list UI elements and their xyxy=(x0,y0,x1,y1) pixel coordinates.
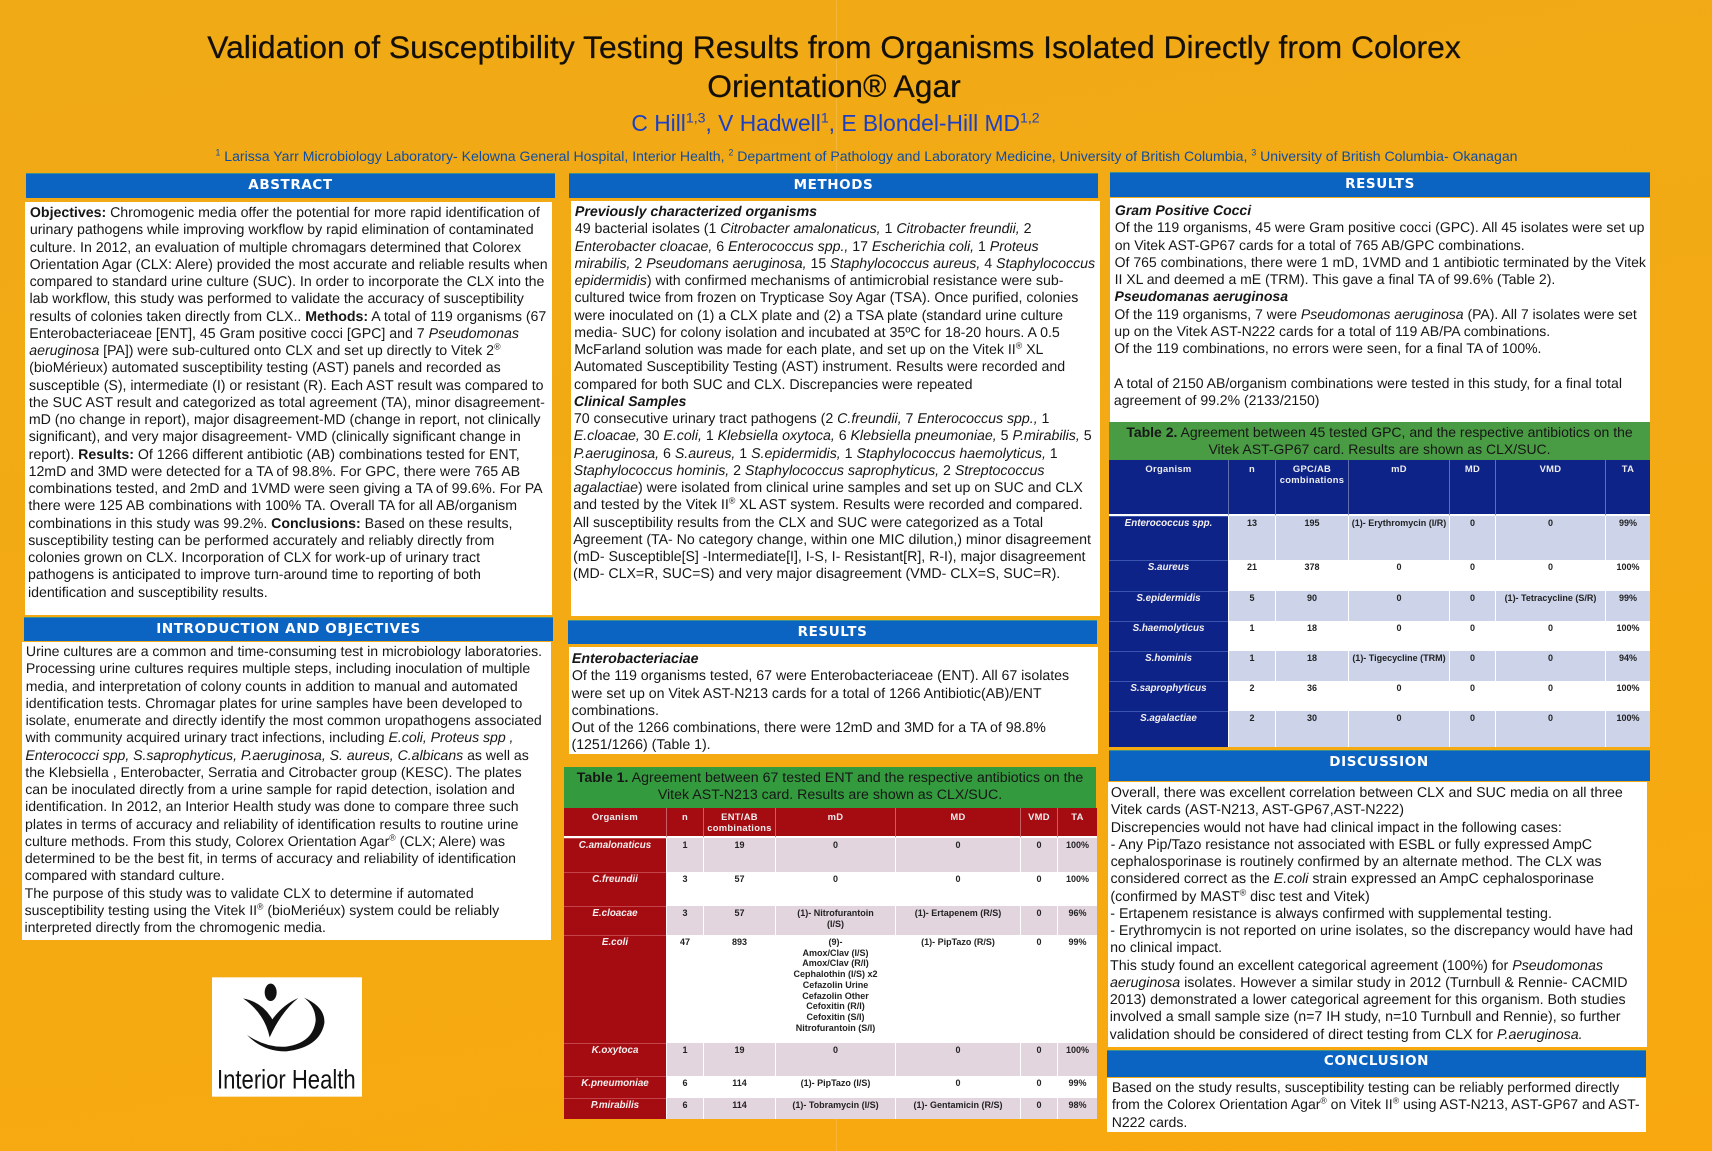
text: abstract: report). Results: Of 1266 different antibiotic (AB) combinations tested for ENT, xyxy=(29,446,520,462)
table 1 grid: (1)- Nitrofurantoin xyxy=(797,908,874,918)
text: results GPC and PA: II XL and deemed a mE (TRM). This gave a final TA of 99.6% (Table 2). xyxy=(1115,271,1555,287)
table 1 grid: 100% xyxy=(1066,874,1089,884)
text: abstract: the SUC AST result and categorized as total agreement (TA), minor disagreement- xyxy=(29,394,545,410)
text: discussion: considered correct as the E.coli strain expressed an AmpC cephalosporinase xyxy=(1110,872,1594,888)
table 2 grid: 0 xyxy=(1470,593,1475,603)
table 2 grid: 0 xyxy=(1470,683,1475,693)
table 1 grid: (I/S) xyxy=(827,919,844,929)
table 1 grid: C.amalonaticus xyxy=(579,840,651,851)
heading: methods: METHODS xyxy=(794,177,873,193)
text: introduction: plates in terms of accuracy and reliability of identification results to routine urine xyxy=(25,816,519,832)
table 2 grid: mD xyxy=(1391,463,1407,474)
text: introduction: The purpose of this study was to validate CLX to determine if automated xyxy=(25,885,474,901)
table 1 grid: (1)- PipTazo (R/S) xyxy=(921,937,995,947)
table 2 grid: combinations xyxy=(1280,474,1344,485)
title xyxy=(207,29,1461,104)
table 1 grid: n xyxy=(682,811,688,822)
table 2 grid: 0 xyxy=(1548,713,1553,723)
table 2 grid: 18 xyxy=(1307,623,1317,633)
table 2: GPC agreement xyxy=(1109,422,1650,747)
table 2 grid: 0 xyxy=(1548,683,1553,693)
table 1 caption: Vitek AST-N213 card. Results are shown as CLX/SUC. xyxy=(658,787,1002,803)
table 2 grid: 0 xyxy=(1396,713,1402,723)
table 1 grid: Cefoxitin (R/I) xyxy=(806,1001,865,1011)
text: results GPC and PA xyxy=(1110,198,1650,422)
text: results GPC and PA: Of 765 combinations, there were 1 mD, 1VMD and 1 antibiotic terminated by the Vitek xyxy=(1115,254,1646,270)
text: methods: Automated Susceptibility Testing (AST) instrument. Results were recorded and xyxy=(574,359,1065,375)
text: introduction: the Klebsiella , Enterobacter, Serratia and Citrobacter group (KESC). The plates xyxy=(25,764,522,780)
table 1 grid: 100% xyxy=(1066,1045,1089,1055)
table 2 grid: 100% xyxy=(1616,562,1640,572)
authors: C Hill1,3, V Hadwell1, E Blondel-Hill MD1,2 xyxy=(631,109,1040,136)
table 1 grid: P.mirabilis xyxy=(591,1100,639,1111)
table 1 grid: 0 xyxy=(1036,1100,1042,1110)
table 1 grid: Cefazolin Urine xyxy=(803,980,868,990)
text: methods: Enterobacter cloacae, 6 Enterococcus spp., 17 Escherichia coli, 1 Proteus xyxy=(575,238,1039,254)
text: abstract: significant), and very major disagreement- VMD (clinically significant change in xyxy=(29,429,521,445)
text: abstract: susceptible (S), intermediate (I) or resistant (R). Each AST result was compared to xyxy=(29,377,544,393)
text: abstract: mD (no change in report), major disagreement-MD (change in report, not clinically xyxy=(29,411,541,427)
text: abstract xyxy=(25,202,552,615)
table 1 grid: 19 xyxy=(734,1045,744,1055)
table 1 grid: (1)- Gentamicin (R/S) xyxy=(913,1100,1002,1110)
table 1 grid: VMD xyxy=(1028,811,1050,822)
text: methods: media- SUC) for colony isolation and incubated at 35ºC for 18-20 hours. A 0.5 xyxy=(574,324,1060,340)
text: introduction: susceptibility testing using the Vitek II® (bioMeriéux) system could be reliably xyxy=(25,901,499,918)
text: methods: Previously characterized organisms xyxy=(575,203,817,219)
text: conclusion: Based on the study results, susceptibility testing can be reliably performed directly xyxy=(1112,1079,1619,1095)
text: methods: Clinical Samples xyxy=(574,393,686,409)
table 2 grid: S.haemolyticus xyxy=(1133,623,1204,634)
table 1 grid: 99% xyxy=(1068,1078,1086,1088)
table 2 grid: 90 xyxy=(1307,593,1317,603)
table 1 grid: 0 xyxy=(1036,874,1042,884)
table 2 grid: 0 xyxy=(1470,653,1475,663)
text: discussion: no clinical impact. xyxy=(1110,941,1222,957)
text: results Enterobacteriaciae: Out of the 1266 combinations, there were 12mD and 3MD for a TA of 98.8% xyxy=(572,719,1046,735)
heading: abstract xyxy=(26,173,555,198)
table 1 grid: E.coli xyxy=(602,937,628,948)
table 1 grid: 57 xyxy=(734,874,744,884)
panel: results (Enterobacteriaciae) xyxy=(568,620,1098,754)
table 2 grid: (1)- Tetracycline (S/R) xyxy=(1505,593,1596,603)
table 2 grid: 99% xyxy=(1619,593,1637,603)
text: results GPC and PA: up on the Vitek AST-N222 cards for a total of 119 AB/PA combinations. xyxy=(1114,323,1550,339)
table 1 grid: 47 xyxy=(680,937,690,947)
table 1 grid: 0 xyxy=(955,1045,960,1055)
text: methods: and tested by the Vitek II® XL AST system. Results were recorded and compared. xyxy=(573,496,1083,513)
text: introduction: with community acquired urinary tract infections, including E.coli, Proteus spp , xyxy=(25,730,514,746)
table 1 grid: Cefazolin Other xyxy=(802,991,869,1001)
table 2 grid: 21 xyxy=(1247,562,1257,572)
text: abstract: there were 125 AB combinations with 100% TA. Overall TA for all AB/organism xyxy=(28,498,517,514)
table 2 grid: 0 xyxy=(1548,653,1553,663)
table 1 grid: 0 xyxy=(833,1045,838,1055)
table 2 grid: 0 xyxy=(1470,562,1475,572)
logo: Interior Health xyxy=(212,977,362,1097)
text: methods: agalactiae) were isolated from clinical urine samples and set up on SUC and CLX xyxy=(573,479,1083,495)
text: conclusion xyxy=(1107,1078,1646,1132)
text: discussion: - Ertapenem resistance is always confirmed with supplemental testing. xyxy=(1110,906,1552,922)
text: methods: 70 consecutive urinary tract pathogens (2 C.freundii, 7 Enterococcus spp., 1 xyxy=(574,410,1049,426)
text: conclusion: from the Colorex Orientation Agar® on Vitek II® using AST-N213, AST-GP67 and AST- xyxy=(1112,1096,1640,1113)
table 2 grid: VMD xyxy=(1540,463,1561,474)
table 2 grid: 94% xyxy=(1619,653,1637,663)
table 2 grid: 2 xyxy=(1249,713,1254,723)
text: abstract: pathogens is anticipated to improve turn-around time to reporting of both xyxy=(28,567,481,583)
text: results GPC and PA: Pseudomanas aeruginosa xyxy=(1114,289,1288,305)
text: abstract: compared to standard urine culture (SUC). In order to incorporate the CLX into the xyxy=(30,273,544,289)
heading: results: RESULTS xyxy=(798,624,867,640)
text: discussion: 2013) demonstrated a lower categorical agreement for this organism. Both studies xyxy=(1110,992,1626,1008)
table 2 grid: (1)- Erythromycin (I/R) xyxy=(1352,518,1446,528)
panel: introduction and objectives xyxy=(22,617,553,940)
table 2 grid: 0 xyxy=(1548,562,1553,572)
text: conclusion: N222 cards. xyxy=(1112,1114,1187,1130)
table 1 grid: Nitrofurantoin (S/I) xyxy=(796,1023,875,1033)
text: abstract: culture. In 2012, an evaluation of multiple chromagars determined that Colorex xyxy=(30,239,521,255)
table 1 grid: 96% xyxy=(1068,908,1086,918)
heading: conclusion: CONCLUSION xyxy=(1324,1053,1429,1069)
table 2 grid: 36 xyxy=(1307,683,1317,693)
table 1 caption xyxy=(564,767,1096,808)
table 2 grid: 0 xyxy=(1548,518,1553,528)
text: discussion: cephalosporinase is routinely confirmed by an alternate method. The CLX was xyxy=(1111,854,1602,870)
table 2 grid: GPC/AB xyxy=(1293,463,1331,474)
panel: results (Gram positive cocci, Pseudomonas) xyxy=(1110,172,1650,422)
table 2 grid xyxy=(1109,460,1650,747)
text: methods: cultured twice from frozen on Trypticase Soy Agar (TSA). Once purified, colonies xyxy=(574,290,1078,306)
table 2 grid: S.aureus xyxy=(1148,562,1189,573)
text: results GPC and PA: on Vitek AST-GP67 cards for a total of 765 AB/GPC combinations. xyxy=(1115,237,1525,253)
table 2 grid: S.hominis xyxy=(1145,653,1192,664)
title: Validation of Susceptibility Testing Results from Organisms Isolated Directly from Colorex xyxy=(207,29,1461,65)
table 1 grid: 0 xyxy=(955,840,960,850)
text: abstract: lab workflow, this study was performed to validate the accuracy of susceptibility xyxy=(29,291,524,307)
text: results Enterobacteriaciae: (1251/1266) (Table 1). xyxy=(571,737,711,753)
table 2 grid: Organism xyxy=(1145,463,1192,474)
text: results GPC and PA: agreement of 99.2% (2133/2150) xyxy=(1114,392,1319,408)
table 1 grid: combinations xyxy=(707,822,772,833)
text: discussion: Vitek cards (AST-N213, AST-GP67,AST-N222) xyxy=(1111,803,1404,819)
text: results Enterobacteriaciae: Of the 119 organisms tested, 67 were Enterobacteriaceae (ENT). All 67 isolates xyxy=(572,668,1069,684)
table 1 grid: 0 xyxy=(833,874,838,884)
table 1 grid: Cephalothin (I/S) x2 xyxy=(793,969,878,979)
table 1 grid: ENT/AB xyxy=(721,811,758,822)
text: results GPC and PA: Of the 119 organisms, 45 were Gram positive cocci (GPC). All 45 isolates were set up xyxy=(1115,220,1645,236)
table 2 grid: 0 xyxy=(1548,623,1553,633)
text: abstract: combinations in this study was 99.2%. Conclusions: Based on these results, xyxy=(28,515,513,531)
table 1 grid: 0 xyxy=(1036,840,1042,850)
text: introduction xyxy=(22,642,551,940)
table 2 grid: 0 xyxy=(1396,562,1402,572)
table 1 grid: K.pneumoniae xyxy=(581,1078,649,1089)
panel: methods xyxy=(569,173,1100,616)
table 2 grid: 13 xyxy=(1247,518,1257,528)
text: discussion: Overall, there was excellent correlation between CLX and SUC media on all three xyxy=(1111,785,1623,801)
panel: discussion xyxy=(1108,750,1650,1047)
table 1 grid: C.freundii xyxy=(592,874,638,885)
affiliations: 1 Larissa Yarr Microbiology Laboratory- Kelowna General Hospital, Interior Health, 2 Department of Pathology and Laboratory Medicine, University of British Columbia, 3 University of British Columbia- Okanagan xyxy=(215,147,1518,164)
text: methods: Staphylococcus hominis, 2 Staphylococcus saprophyticus, 2 Streptococcus xyxy=(574,462,1045,478)
table 1 grid: 3 xyxy=(682,874,688,884)
table 2 grid: 1 xyxy=(1249,623,1254,633)
text: methods: P.aeruginosa, 6 S.aureus, 1 S.epidermidis, 1 Staphylococcus haemolyticus, 1 xyxy=(574,445,1058,461)
table 1 grid: (1)- Tobramycin (I/S) xyxy=(792,1100,879,1110)
panel: conclusion xyxy=(1107,1050,1646,1132)
text: results GPC and PA: Of the 119 organisms, 7 were Pseudomonas aeruginosa (PA). All 7 isolates were set xyxy=(1114,306,1637,322)
text: introduction: can be inoculated directly from a urine sample for rapid detection, isolation and xyxy=(25,781,515,797)
table 1 grid: 0 xyxy=(1036,937,1042,947)
heading: conclusion xyxy=(1107,1050,1646,1077)
table 2 grid: 100% xyxy=(1616,683,1640,693)
text: abstract: Enterobacteriaceae [ENT], 45 Gram positive cocci [GPC] and 7 Pseudomonas xyxy=(29,325,519,341)
text: methods xyxy=(570,201,1100,616)
panel: abstract xyxy=(25,173,555,615)
table 1 grid: mD xyxy=(828,811,843,822)
text: discussion: Discrepencies would not have had clinical impact in the following cases: xyxy=(1111,820,1562,836)
table 2 grid: S.agalactiae xyxy=(1140,713,1197,724)
text: introduction: determined to be the best fit, in terms of accuracy and reliability of identification xyxy=(25,850,516,866)
table 1 grid: 0 xyxy=(955,874,960,884)
text: results Enterobacteriaciae xyxy=(569,647,1098,754)
text: discussion: involved a small sample size (n=7 IH study, n=10 Turnbull and Rennie), so further xyxy=(1110,1010,1621,1026)
table 2 grid: 100% xyxy=(1616,713,1640,723)
text: methods: Agreement (TA- No category change, within one MIC dilution,) minor disagreement xyxy=(573,531,1091,547)
table 2 grid: 5 xyxy=(1249,593,1254,603)
text: introduction: identification tests. Chromagar plates for urine samples have been developed to xyxy=(26,695,522,711)
table 1 grid: 99% xyxy=(1068,937,1086,947)
heading: results: RESULTS xyxy=(1345,176,1415,192)
table 2 grid: 195 xyxy=(1304,518,1320,528)
table 2 grid: S.epidermidis xyxy=(1136,593,1201,604)
text: abstract: aeruginosa [PA]) were sub-cultured onto CLX and set up directly to Vitek 2® xyxy=(29,342,501,358)
table 1 grid: (1)- PipTazo (I/S) xyxy=(801,1078,870,1088)
heading: abstract: ABSTRACT xyxy=(248,177,333,193)
table 2 grid: 0 xyxy=(1396,683,1402,693)
table 1 grid: K.oxytoca xyxy=(592,1045,638,1056)
heading: methods xyxy=(569,173,1098,198)
table 1 grid: MD xyxy=(950,811,966,822)
text: methods: (mD- Susceptible[S] -Intermediate[I], I-S, I- Resistant[R], R-I), major disagreement xyxy=(573,548,1086,564)
text: methods: All susceptibility results from the CLX and SUC were categorized as a Total xyxy=(573,514,1043,530)
table 2 grid: 0 xyxy=(1396,623,1402,633)
table 2 grid: 2 xyxy=(1249,683,1254,693)
text: methods: compared for both SUC and CLX. Discrepancies were repeated xyxy=(574,376,973,392)
text: abstract: combinations tested, and 2mD and 1VMD were seen giving a TA of 99.6%. For PA xyxy=(28,480,543,496)
title: Orientation® Agar xyxy=(707,68,961,104)
text: abstract: Objectives: Chromogenic media offer the potential for more rapid identification of xyxy=(30,204,540,220)
table 2 grid: S.saprophyticus xyxy=(1130,683,1207,694)
text: methods: epidermidis) with confirmed mechanisms of antimicrobial resistance were sub- xyxy=(575,272,1063,288)
table 1 grid xyxy=(564,808,1097,1119)
table 1 grid: E.cloacae xyxy=(592,908,638,919)
table 1 grid: 0 xyxy=(955,1078,960,1088)
table 1 grid: (9)- xyxy=(828,937,842,947)
table 1 grid: 6 xyxy=(682,1100,688,1110)
table 1: ENT agreement xyxy=(564,767,1097,1119)
table 1 grid: 57 xyxy=(734,908,744,918)
heading: discussion: DISCUSSION xyxy=(1329,754,1429,770)
table 2 grid: 0 xyxy=(1396,593,1402,603)
heading: introduction and objectives xyxy=(24,617,553,641)
table 1 grid: 19 xyxy=(734,840,744,850)
table 1 grid: 0 xyxy=(1036,908,1042,918)
text: results GPC and PA: A total of 2150 AB/organism combinations were tested in this study, for a final total xyxy=(1114,375,1622,391)
text: introduction: media, and interpretation of colony counts in addition to manual and automated xyxy=(26,678,518,694)
table 2 grid: 1 xyxy=(1249,653,1254,663)
text: abstract: susceptibility testing can be performed accurately and reliably directly from xyxy=(28,532,494,548)
text: abstract: colonies grown on CLX. Incorporation of CLX for work-up of urinary tract xyxy=(28,549,480,565)
table 1 grid: 3 xyxy=(682,908,688,918)
text: results GPC and PA: Gram Positive Cocci xyxy=(1115,202,1251,218)
table 1 grid: 0 xyxy=(833,840,838,850)
text: abstract: Orientation Agar (CLX: Alere) provided the most accurate and reliable results when xyxy=(30,256,548,272)
table 1 grid: 98% xyxy=(1068,1100,1086,1110)
text: results Enterobacteriaciae: combinations. xyxy=(572,702,659,718)
table 2 caption: Table 2. Agreement between 45 tested GPC, and the respective antibiotics on the xyxy=(1126,424,1633,440)
text: results Enterobacteriaciae: Enterobacteriaciae xyxy=(572,650,699,666)
table 2 caption xyxy=(1109,422,1650,460)
table 1 grid: 114 xyxy=(732,1100,747,1110)
text: results Enterobacteriaciae: were set up on Vitek AST-N213 cards for a total of 1266 Antibiotic(AB)/ENT xyxy=(572,685,1042,701)
text: abstract: results of colonies taken directly from CLX.. Methods: A total of 119 organisms (67 xyxy=(29,308,546,324)
text: introduction: compared with standard culture. xyxy=(25,868,225,884)
heading: introduction and objectives: INTRODUCTION AND OBJECTIVES xyxy=(156,621,421,637)
text: introduction: Urine cultures are a common and time-consuming test in microbiology laboratories. xyxy=(26,643,542,659)
table 2 grid: MD xyxy=(1465,463,1480,474)
text: introduction: Processing urine cultures requires multiple steps, including inoculation of multiple xyxy=(26,661,530,677)
table 1 grid: TA xyxy=(1071,811,1084,822)
table 2 grid: n xyxy=(1249,463,1255,474)
text: discussion: validation should be considered of direct testing from CLX for P.aeruginosa. xyxy=(1110,1027,1583,1043)
table 1 grid: 6 xyxy=(682,1078,688,1088)
text: introduction: interpreted directly from the chromogenic media. xyxy=(24,919,326,935)
table 1 grid: Organism xyxy=(592,811,638,822)
text: methods: were inoculated on (1) a CLX plate and (2) a TSA plate (standard urine culture xyxy=(574,307,1063,323)
heading: discussion xyxy=(1108,750,1650,781)
text: introduction: isolate, enumerate and directly identify the most common uropathogens associated xyxy=(26,712,542,728)
table 1 grid: 100% xyxy=(1066,840,1089,850)
table 1 grid: 893 xyxy=(732,937,747,947)
text: abstract: urinary pathogens while improving workflow by rapid elimination of contaminated xyxy=(30,222,534,238)
text: methods: E.cloacae, 30 E.coli, 1 Klebsiella oxytoca, 6 Klebsiella pneumoniae, 5 P.mirabilis, 5 xyxy=(574,428,1092,444)
text: abstract: identification and susceptibility results. xyxy=(28,584,268,600)
text: discussion: aeruginosa isolates. However a similar study in 2012 (Turnbull & Rennie- CACMID xyxy=(1110,975,1628,991)
text: abstract: 12mD and 3MD were detected for a TA of 98.8%. For GPC, there were 765 AB xyxy=(29,463,520,479)
text: discussion: This study found an excellent categorical agreement (100%) for Pseudomonas xyxy=(1110,958,1603,974)
text: methods: 49 bacterial isolates (1 Citrobacter amalonaticus, 1 Citrobacter freundii, 2 xyxy=(575,221,1032,237)
table 1 grid: Amox/Clav (R/I) xyxy=(802,958,869,968)
table 1 grid: Cefoxitin (S/I) xyxy=(806,1012,864,1022)
text: introduction: identification. In 2012, an Interior Health study was done to compare three such xyxy=(25,799,519,815)
text: introduction: culture methods. From this study, Colorex Orientation Agar® (CLX; Alere) was xyxy=(25,832,505,849)
text: methods: McFarland solution was made for each plate, and set up on the Vitek II® XL xyxy=(574,341,1043,357)
table 1 grid: 114 xyxy=(732,1078,747,1088)
text: discussion: (confirmed by MAST® disc test and Vitek) xyxy=(1110,887,1370,905)
table 2 grid: (1)- Tigecycline (TRM) xyxy=(1352,653,1446,663)
text: discussion xyxy=(1108,782,1647,1047)
text: methods: mirabilis, 2 Pseudomans aeruginosa, 15 Staphylococcus aureus, 4 Staphylococcus xyxy=(575,255,1095,271)
table 2 caption: Vitek AST-GP67 card. Results are shown as CLX/SUC. xyxy=(1208,441,1551,457)
table 2 grid: TA xyxy=(1622,463,1634,474)
table 1 caption: Table 1. Agreement between 67 tested ENT and the respective antibiotics on the xyxy=(577,770,1083,786)
table 2 grid: 0 xyxy=(1470,713,1475,723)
text: introduction: Enterococci spp, S.saprophyticus, P.aeruginosa, S. aureus, C.albicans as well as xyxy=(25,747,529,763)
table 2 grid: 99% xyxy=(1619,518,1637,528)
table 1 grid: (1)- Ertapenem (R/S) xyxy=(915,908,1001,918)
text: methods: (MD- CLX=R, SUC=S) and very major disagreement (VMD- CLX=S, SUC=R). xyxy=(573,566,1060,582)
table 2 grid: 0 xyxy=(1470,518,1475,528)
table 2 grid: 18 xyxy=(1307,653,1317,663)
table 2 grid: 0 xyxy=(1470,623,1475,633)
table 1 grid: 1 xyxy=(682,840,688,850)
table 1 grid: 0 xyxy=(1036,1045,1042,1055)
text: discussion: - Erythromycin is not reported on urine isolates, so the discrepancy would have had xyxy=(1110,923,1633,939)
table 2 grid: Enterococcus spp. xyxy=(1125,518,1212,529)
table 1 grid: 0 xyxy=(1036,1078,1042,1088)
heading: results xyxy=(1110,172,1650,197)
table 2 grid: 30 xyxy=(1307,713,1317,723)
heading: results xyxy=(568,620,1097,644)
table 2 grid: 378 xyxy=(1304,562,1320,572)
table 1 grid: Amox/Clav (I/S) xyxy=(802,948,868,958)
text: results GPC and PA: Of the 119 combinations, no errors were seen, for a final TA of 100%. xyxy=(1114,340,1542,356)
table 2 grid: 100% xyxy=(1616,623,1640,633)
table 1 grid: 1 xyxy=(682,1045,688,1055)
text: abstract: (bioMérieux) automated susceptibility testing (AST) panels and recorded as xyxy=(29,360,501,376)
text: discussion: - Any Pip/Tazo resistance not associated with ESBL or fully expressed AmpC xyxy=(1111,837,1592,853)
